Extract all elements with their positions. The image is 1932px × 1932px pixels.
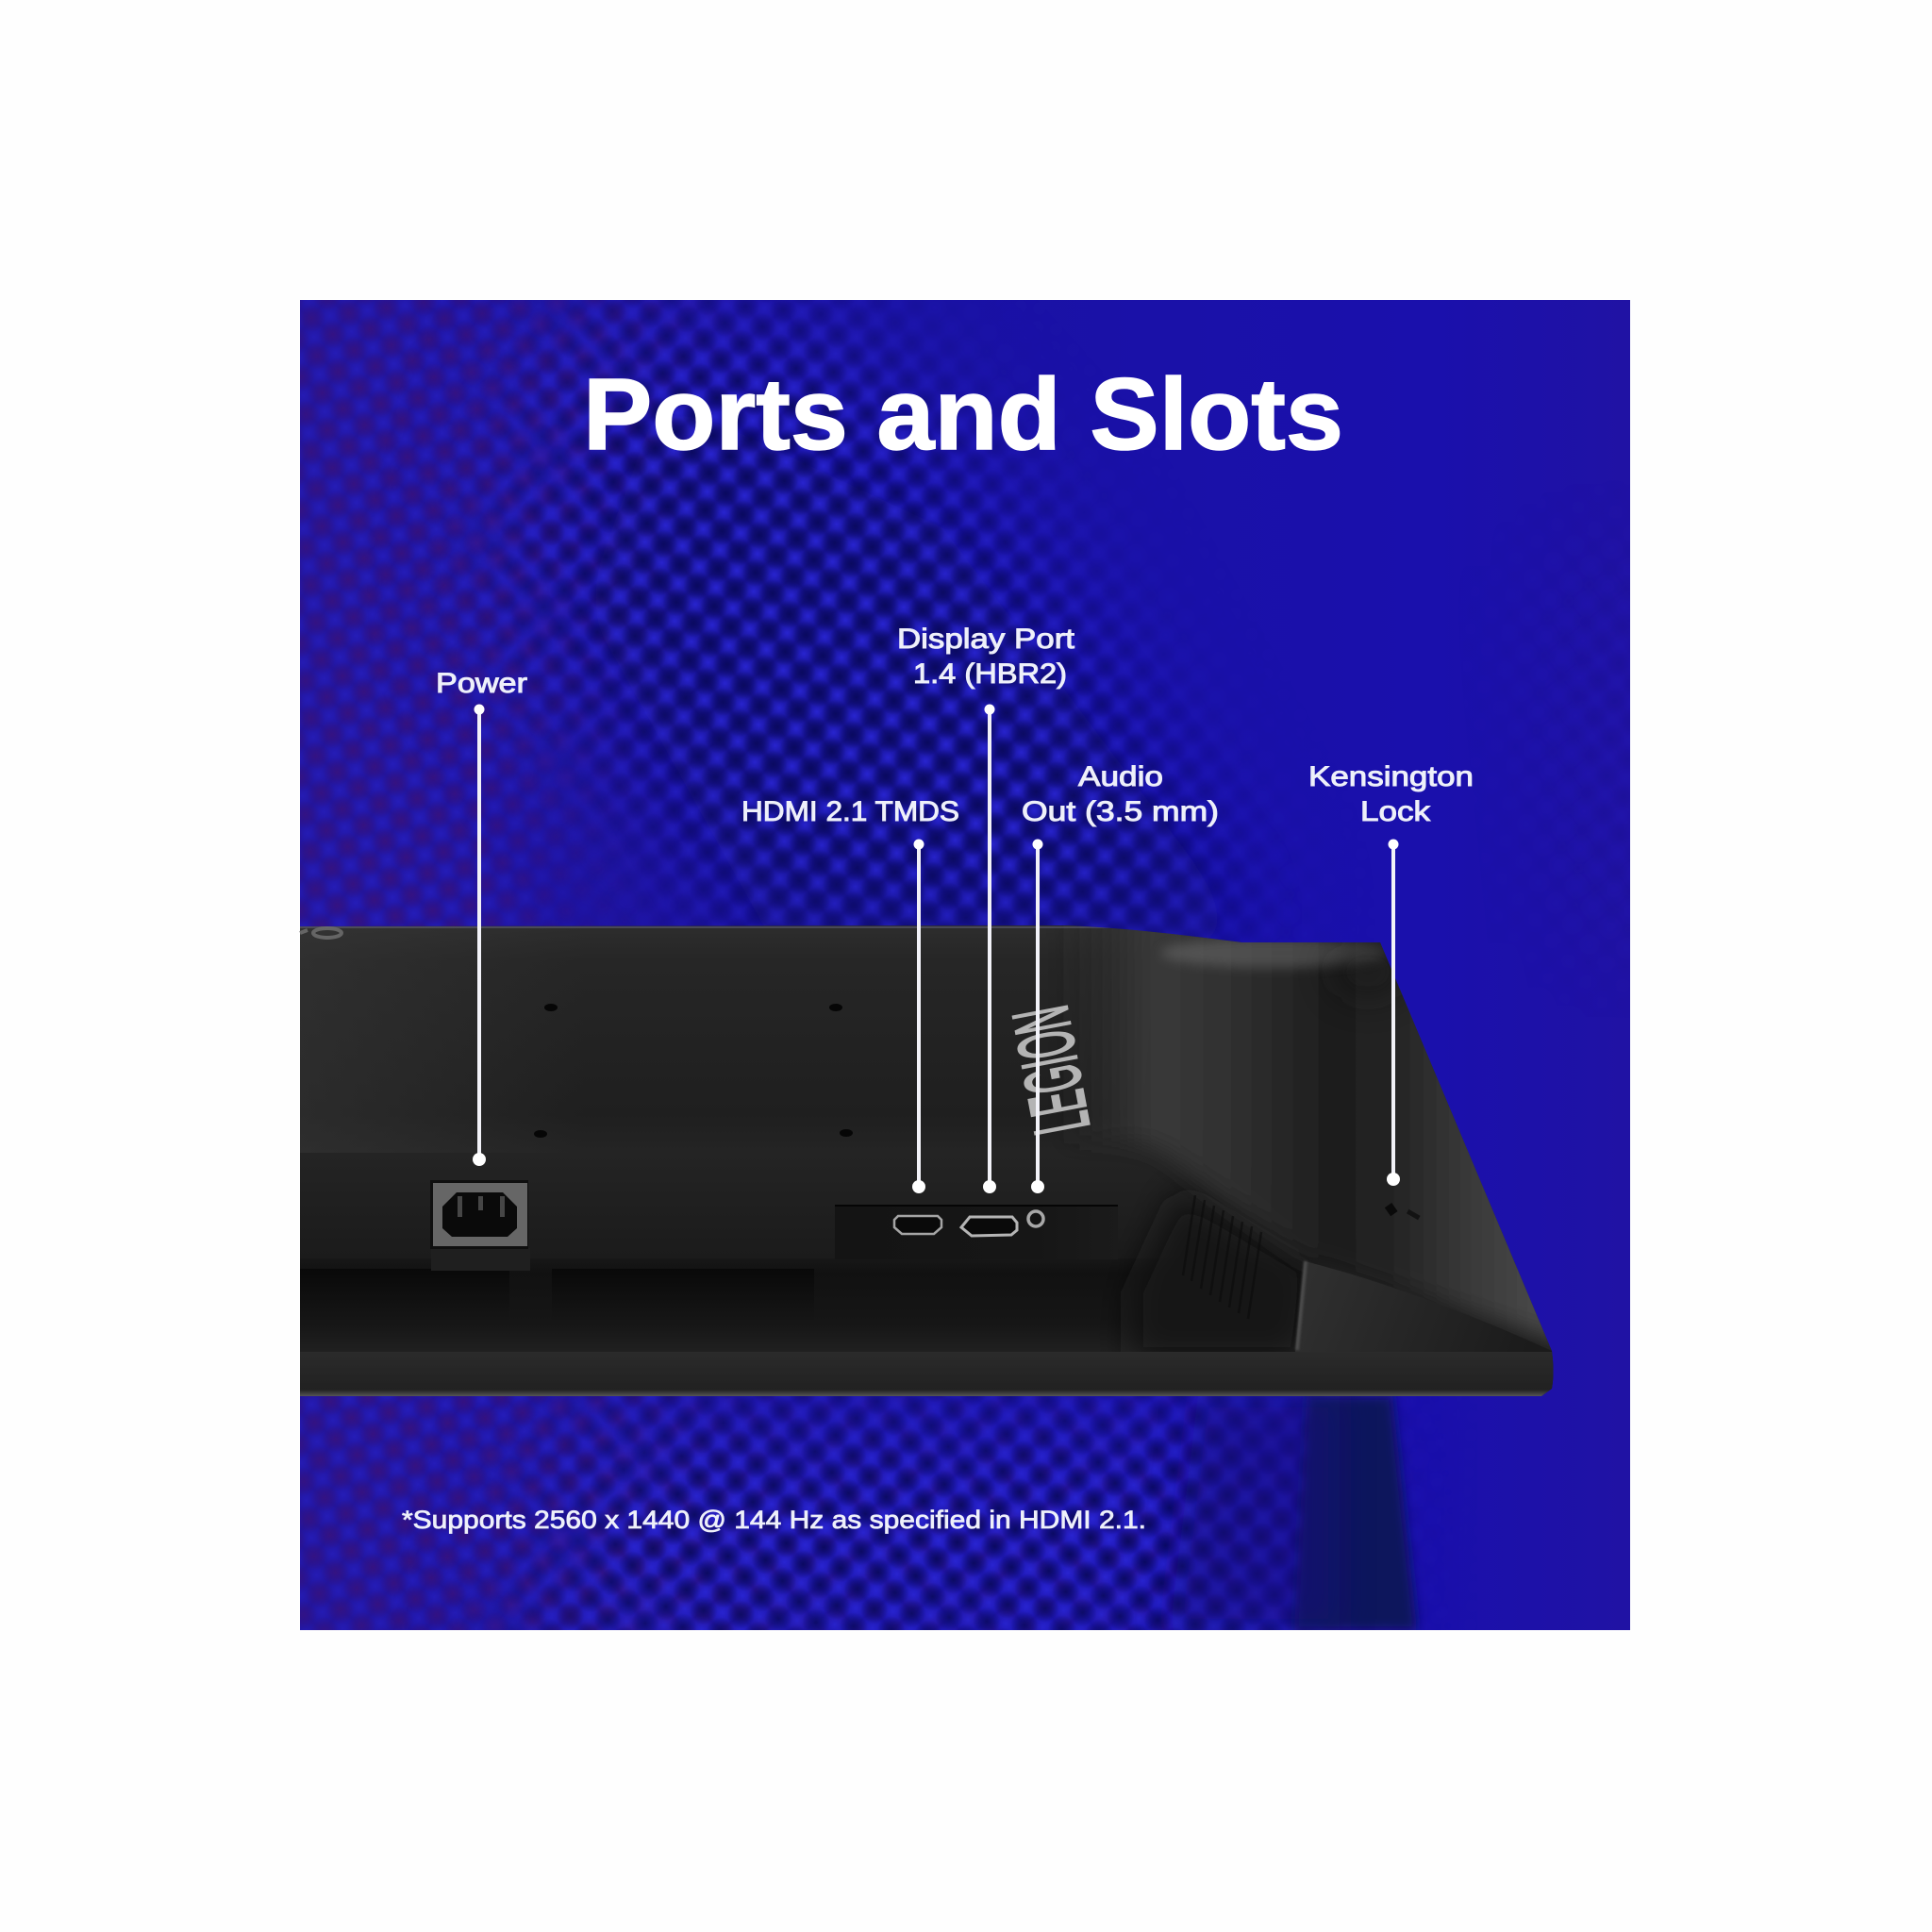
DisplayPort port xyxy=(961,1217,1017,1236)
audio jack xyxy=(1028,1211,1043,1226)
callout: HDMI xyxy=(741,796,959,1193)
title: Ports and Slots xyxy=(583,357,1343,471)
callout: Audio Out: Audio xyxy=(1078,761,1163,792)
brand ring at top left xyxy=(300,928,341,938)
HDMI port xyxy=(894,1216,941,1234)
footnote: *Supports 2560 x 1440 @ 144 Hz as specified in HDMI 2.1. xyxy=(402,1506,1146,1534)
vent slots xyxy=(1189,1195,1262,1258)
panel: blue halftone background xyxy=(300,300,1630,1630)
monitor rear view xyxy=(300,896,1585,1401)
callout: Kensington Lock: Kensington xyxy=(1308,761,1474,792)
callout: Power: Power xyxy=(436,668,527,699)
power socket xyxy=(430,1180,528,1249)
callout: HDMI: HDMI 2.1 TMDS xyxy=(741,796,959,827)
soft shoulder of monitor housing xyxy=(1096,926,1551,1349)
callout: Audio Out xyxy=(1022,761,1219,1193)
monitor rear view: LEGION xyxy=(995,1000,1107,1141)
callout: Display Port xyxy=(897,624,1075,1193)
callout: Kensington Lock xyxy=(1308,761,1474,1186)
callout: Audio Out: Out (3.5 mm) xyxy=(1022,796,1219,827)
callout: Kensington Lock: Lock xyxy=(1360,796,1431,827)
port block xyxy=(835,1205,1118,1259)
mounting screw holes xyxy=(534,1004,853,1138)
callout: Display Port: Display Port xyxy=(897,624,1075,655)
lower corner facet xyxy=(1295,1261,1554,1352)
callout: Display Port: 1.4 (HBR2) xyxy=(913,658,1067,690)
infographic canvas xyxy=(299,300,1630,1630)
callout: Power xyxy=(436,668,527,1166)
recess panels under ports xyxy=(300,1259,814,1272)
bottom bezel bar xyxy=(300,1352,1564,1396)
kensington lock slot xyxy=(1385,1203,1421,1220)
